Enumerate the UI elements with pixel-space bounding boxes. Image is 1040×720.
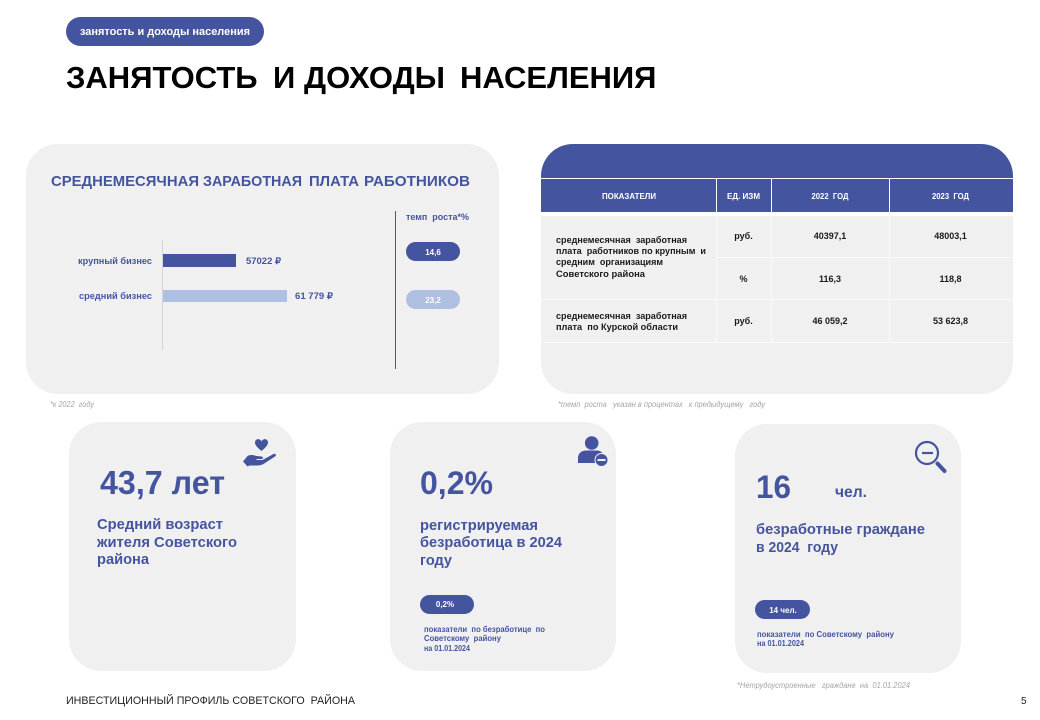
row: Sovetsky district salary: среднемесячная заработная: [556, 235, 687, 245]
row: Kursk region salary: [556, 311, 968, 332]
row: Sovetsky district salary: 118,8: [939, 274, 962, 284]
pill: 23,2: 23,2: [425, 296, 441, 305]
panel heading: ПЛАТА: [309, 173, 359, 190]
bar: large business: [78, 254, 281, 267]
panel: unemployed citizens: [735, 424, 961, 673]
stat description: района: [97, 551, 150, 568]
table header: ЕД. ИЗМ: [727, 192, 760, 201]
panel heading: РАБОТНИКОВ: [364, 173, 470, 190]
stat description: [420, 517, 563, 569]
table grid: [541, 216, 1013, 343]
pill note: [757, 630, 895, 648]
pill note: [424, 625, 545, 653]
table header: 2023 ГОД: [932, 192, 969, 201]
panel heading: [51, 173, 470, 190]
pill: 14 people: 14 чел.: [769, 606, 797, 615]
bar: large business: 57022 ₽: [246, 256, 281, 266]
bar: large business: крупный бизнес: [78, 256, 152, 267]
title: ДОХОДЫ: [304, 60, 445, 95]
row: Sovetsky district salary: плата работников по крупным и: [556, 246, 706, 256]
growth rate column: темп роста*%: [406, 212, 469, 222]
pill note: на 01.01.2024: [424, 644, 470, 653]
pill: 14,6: [406, 242, 460, 261]
row: Sovetsky district salary: 116,3: [819, 274, 841, 284]
pill note: Советскому району: [424, 634, 502, 643]
growth rate column: [396, 211, 469, 369]
panel: registered unemployment: [390, 422, 616, 671]
stat value: чел.: [835, 484, 867, 501]
stat description: в 2024 году: [756, 539, 839, 556]
icon: person with minus: [578, 436, 608, 466]
row: Sovetsky district salary: средним организациям: [556, 257, 663, 267]
stat description: Средний возраст: [97, 516, 223, 533]
pill: 23,2: [406, 290, 460, 309]
row: Kursk region salary: 53 623,8: [933, 316, 968, 326]
panel: average age: [69, 422, 296, 671]
table header: 2022 ГОД: [812, 192, 849, 201]
panel heading: ЗАРАБОТНАЯ: [203, 173, 302, 190]
stat description: жителя Советского: [96, 534, 237, 551]
stat description: [96, 516, 237, 568]
bar chart: [78, 240, 333, 350]
stat description: безработица в 2024: [420, 534, 563, 551]
row: Sovetsky district salary: 40397,1: [814, 231, 846, 241]
stat description: [756, 521, 925, 556]
row: Kursk region salary: 46 059,2: [812, 316, 848, 326]
footnote: growth rate: *темп роста указан в процентах к предыдущему году: [558, 400, 766, 409]
title: И: [273, 60, 295, 95]
section tag pill: [66, 17, 264, 46]
pill note: показатели по Советскому району: [757, 630, 895, 639]
pill note: показатели по безработице по: [424, 625, 545, 634]
panel: salary table: [541, 144, 1013, 394]
pill note: на 01.01.2024: [757, 639, 804, 648]
pill: 0,2%: 0,2%: [436, 600, 454, 609]
row: Kursk region salary: плата по Курской области: [556, 322, 678, 332]
bar: medium business: [79, 290, 333, 302]
title: НАСЕЛЕНИЯ: [460, 60, 656, 95]
row: Sovetsky district salary: %: [739, 274, 748, 284]
stat value: [756, 469, 867, 505]
table header: ПОКАЗАТЕЛИ: [602, 192, 656, 201]
row: Kursk region salary: руб.: [734, 316, 753, 326]
icon: heart in hand: [243, 439, 276, 466]
footnote: to 2022: *к 2022 году: [50, 400, 95, 409]
pill: 14,6: 14,6: [425, 248, 441, 257]
row: Sovetsky district salary: [556, 231, 967, 284]
row: Sovetsky district salary: руб.: [734, 231, 753, 241]
page number: 5: [1021, 696, 1027, 707]
stat value: 0,2%: [420, 465, 493, 501]
stat value: 16: [756, 469, 791, 505]
stat description: безработные граждане: [756, 521, 925, 538]
title: ЗАНЯТОСТЬ: [66, 60, 258, 95]
icon: magnifier with minus: [916, 442, 944, 471]
panel heading: СРЕДНЕМЕСЯЧНАЯ: [51, 173, 199, 190]
pill: 14 people: [755, 600, 810, 619]
row: Kursk region salary: среднемесячная заработная: [556, 311, 687, 321]
pill: 0,2%: [420, 595, 474, 614]
panel: average monthly salary: [26, 144, 499, 394]
bar: medium business: 61 779 ₽: [295, 291, 333, 301]
table header: [541, 179, 1013, 212]
footer text: ИНВЕСТИЦИОННЫЙ ПРОФИЛЬ СОВЕТСКОГО РАЙОНА: [66, 694, 356, 707]
row: Sovetsky district salary: Советского района: [556, 269, 646, 279]
bar: medium business: средний бизнес: [79, 291, 152, 302]
stat description: регистрируемая: [420, 517, 538, 534]
row: Sovetsky district salary: 48003,1: [934, 231, 967, 241]
stat description: году: [420, 552, 453, 569]
footnote: unemployed: *Нетрудоустроенные граждане на 01.01.2024: [737, 681, 911, 690]
section tag pill: занятость и доходы населения: [80, 26, 250, 38]
stat value: 43,7 лет: [100, 464, 225, 501]
